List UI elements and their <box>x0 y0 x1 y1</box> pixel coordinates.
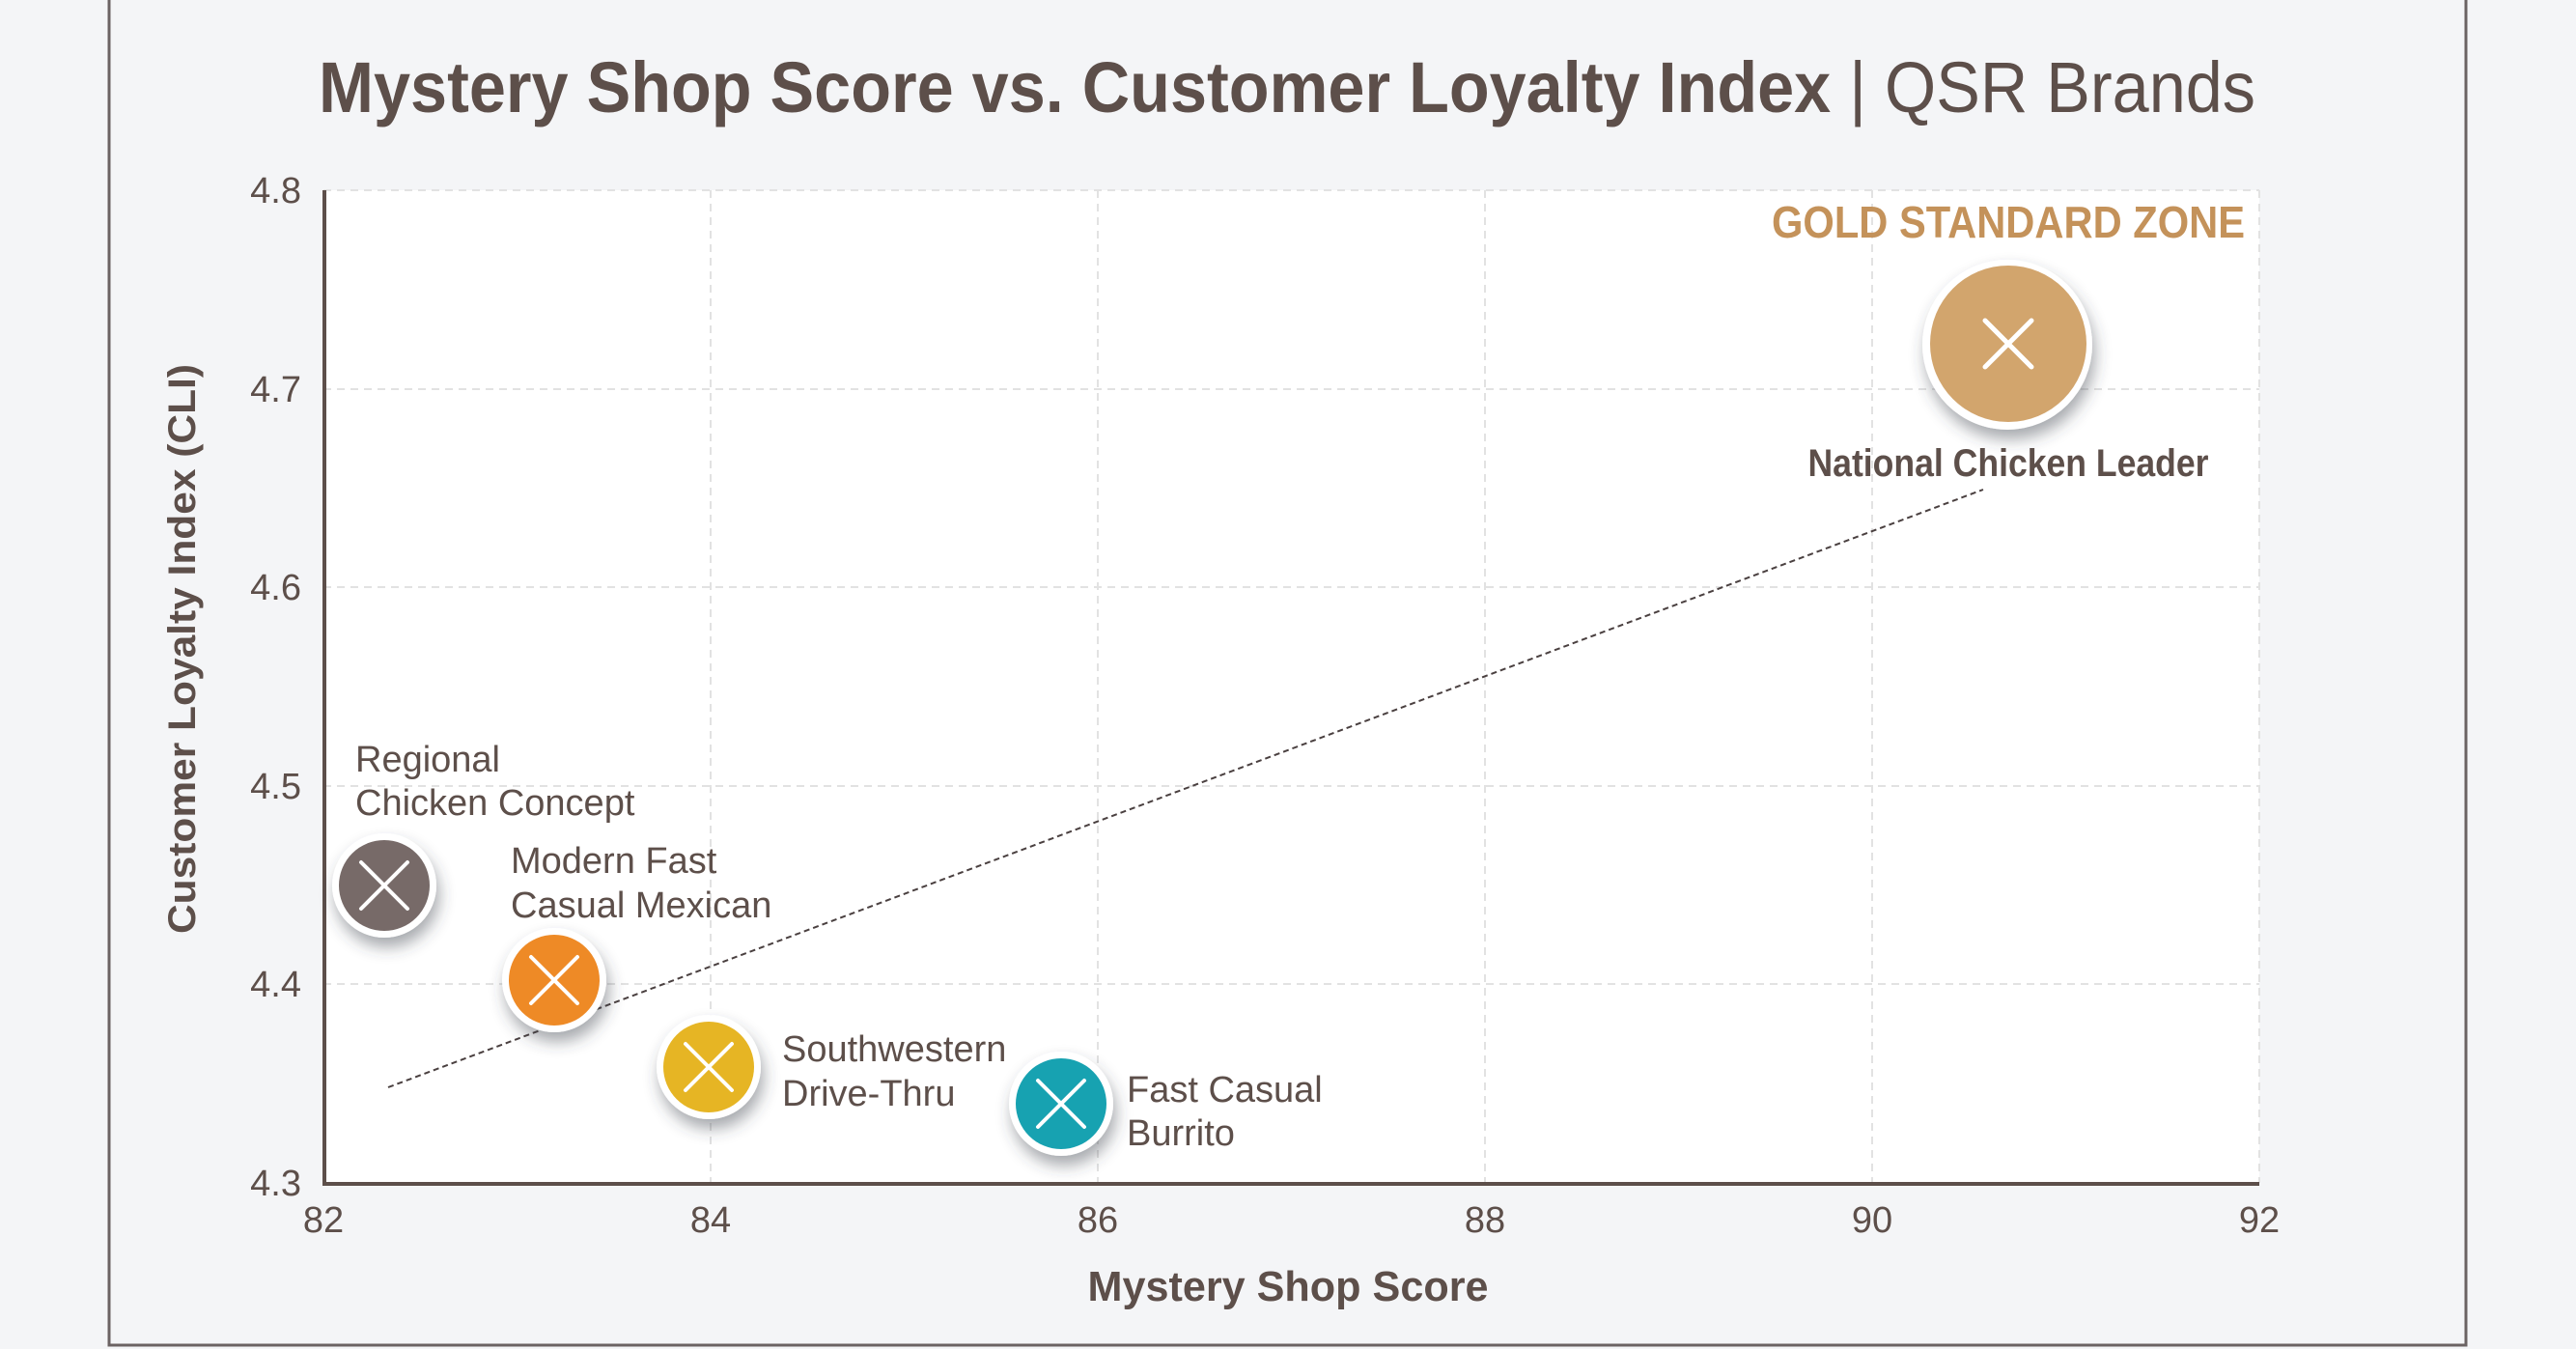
axes <box>324 190 2259 1184</box>
x tick labels: 84 <box>690 1200 731 1241</box>
y axis title: Customer Loyalty Index (CLI) <box>161 364 204 934</box>
y tick labels: 4.7 <box>250 370 301 410</box>
y tick labels: 4.6 <box>250 568 301 608</box>
point: Southwestern Drive-Thru: Drive-Thru <box>782 1074 955 1114</box>
point: Fast Casual Burrito: Fast Casual <box>1127 1070 1323 1110</box>
point: Fast Casual Burrito <box>1009 1052 1323 1156</box>
point: Modern Fast Casual Mexican: Casual Mexican <box>511 885 771 926</box>
chart: scatter plot <box>250 171 2280 1241</box>
y tick labels: 4.5 <box>250 767 301 807</box>
point: Modern Fast Casual Mexican: Modern Fast <box>511 841 717 882</box>
x axis title: Mystery Shop Score <box>1087 1263 1489 1310</box>
y tick labels: 4.3 <box>250 1164 301 1204</box>
x tick labels: 90 <box>1852 1200 1892 1241</box>
x tick labels: 88 <box>1465 1200 1505 1241</box>
x tick labels: 86 <box>1078 1200 1118 1241</box>
x tick labels: 92 <box>2239 1200 2280 1241</box>
title: Mystery Shop Score vs. Customer Loyalty Index | QSR Brands <box>319 47 2255 127</box>
point: Fast Casual Burrito: Burrito <box>1127 1113 1235 1154</box>
point: National Chicken Leader <box>1807 260 2209 485</box>
point: National Chicken Leader: National Chicken Leader <box>1807 442 2209 485</box>
point: Regional Chicken Concept <box>332 740 635 938</box>
x tick labels: 82 <box>303 1200 344 1241</box>
point: Southwestern Drive-Thru <box>657 1015 1006 1119</box>
point: Regional Chicken Concept: Regional <box>355 740 500 780</box>
y tick labels: 4.8 <box>250 171 301 211</box>
x tick labels <box>303 1200 2280 1241</box>
y tick labels <box>250 171 301 1204</box>
point: Southwestern Drive-Thru: Southwestern <box>782 1029 1006 1070</box>
point: Regional Chicken Concept: Chicken Concept <box>355 783 635 824</box>
y tick labels: 4.4 <box>250 965 301 1005</box>
point: Modern Fast Casual Mexican <box>502 841 771 1032</box>
trend line <box>388 490 1983 1087</box>
gold standard zone label: GOLD STANDARD ZONE <box>1772 197 2245 247</box>
